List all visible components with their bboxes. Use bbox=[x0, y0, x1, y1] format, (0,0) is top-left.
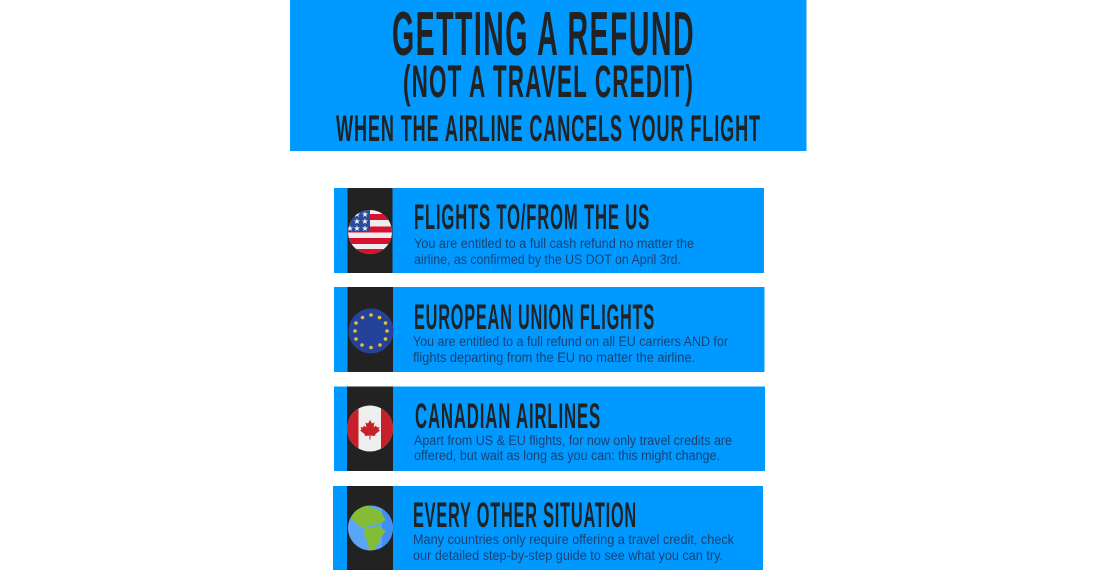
panel: flights to/from the US bbox=[334, 188, 764, 273]
icon: US flag: ★ bbox=[346, 224, 354, 233]
body text bbox=[414, 236, 694, 267]
body text: Apart from US & EU flights, for now only travel credits are bbox=[414, 433, 732, 448]
icon: US flag: ★ bbox=[353, 217, 361, 226]
body text: You are entitled to a full refund on all EU carriers AND for bbox=[413, 334, 728, 349]
header panel bbox=[290, 0, 806, 151]
icon: EU flag bbox=[348, 308, 394, 354]
panel: every other situation: EVERY OTHER SITUATION bbox=[413, 496, 637, 535]
icon: US flag bbox=[346, 210, 392, 254]
panel: Canadian airlines: CANADIAN AIRLINES bbox=[415, 397, 601, 436]
body text bbox=[413, 334, 728, 365]
icon: Canada flag bbox=[347, 405, 393, 452]
panel: European Union flights bbox=[334, 287, 764, 372]
body text: our detailed step-by-step guide to see what you can try. bbox=[413, 548, 723, 563]
panel: Canadian airlines bbox=[334, 386, 765, 471]
panel: European Union flights: EUROPEAN UNION FLIGHTS bbox=[414, 298, 655, 337]
icon: globe bbox=[348, 505, 394, 551]
body text: offered, but wait as long as you can: this might change. bbox=[414, 448, 720, 463]
body text: flights departing from the EU no matter the airline. bbox=[413, 350, 695, 365]
icon: US flag: ★ bbox=[361, 224, 369, 233]
icon: US flag: ★ bbox=[361, 217, 369, 226]
body text bbox=[413, 532, 734, 563]
icon: US flag: ★ bbox=[361, 210, 369, 219]
panel: flights to/from the US: FLIGHTS TO/FROM THE US bbox=[414, 198, 650, 237]
icon: US flag: ★ bbox=[353, 210, 361, 219]
body text: Many countries only require offering a travel credit, check bbox=[413, 532, 734, 547]
header panel: (NOT A TRAVEL CREDIT) bbox=[403, 56, 694, 107]
icon: US flag: ★ bbox=[353, 224, 361, 233]
panel: every other situation bbox=[333, 486, 763, 570]
body text: You are entitled to a full cash refund no matter the bbox=[414, 236, 694, 251]
body text bbox=[414, 433, 732, 463]
header panel: GETTING A REFUND bbox=[392, 0, 695, 69]
body text: airline, as confirmed by the US DOT on April 3rd. bbox=[414, 252, 681, 267]
